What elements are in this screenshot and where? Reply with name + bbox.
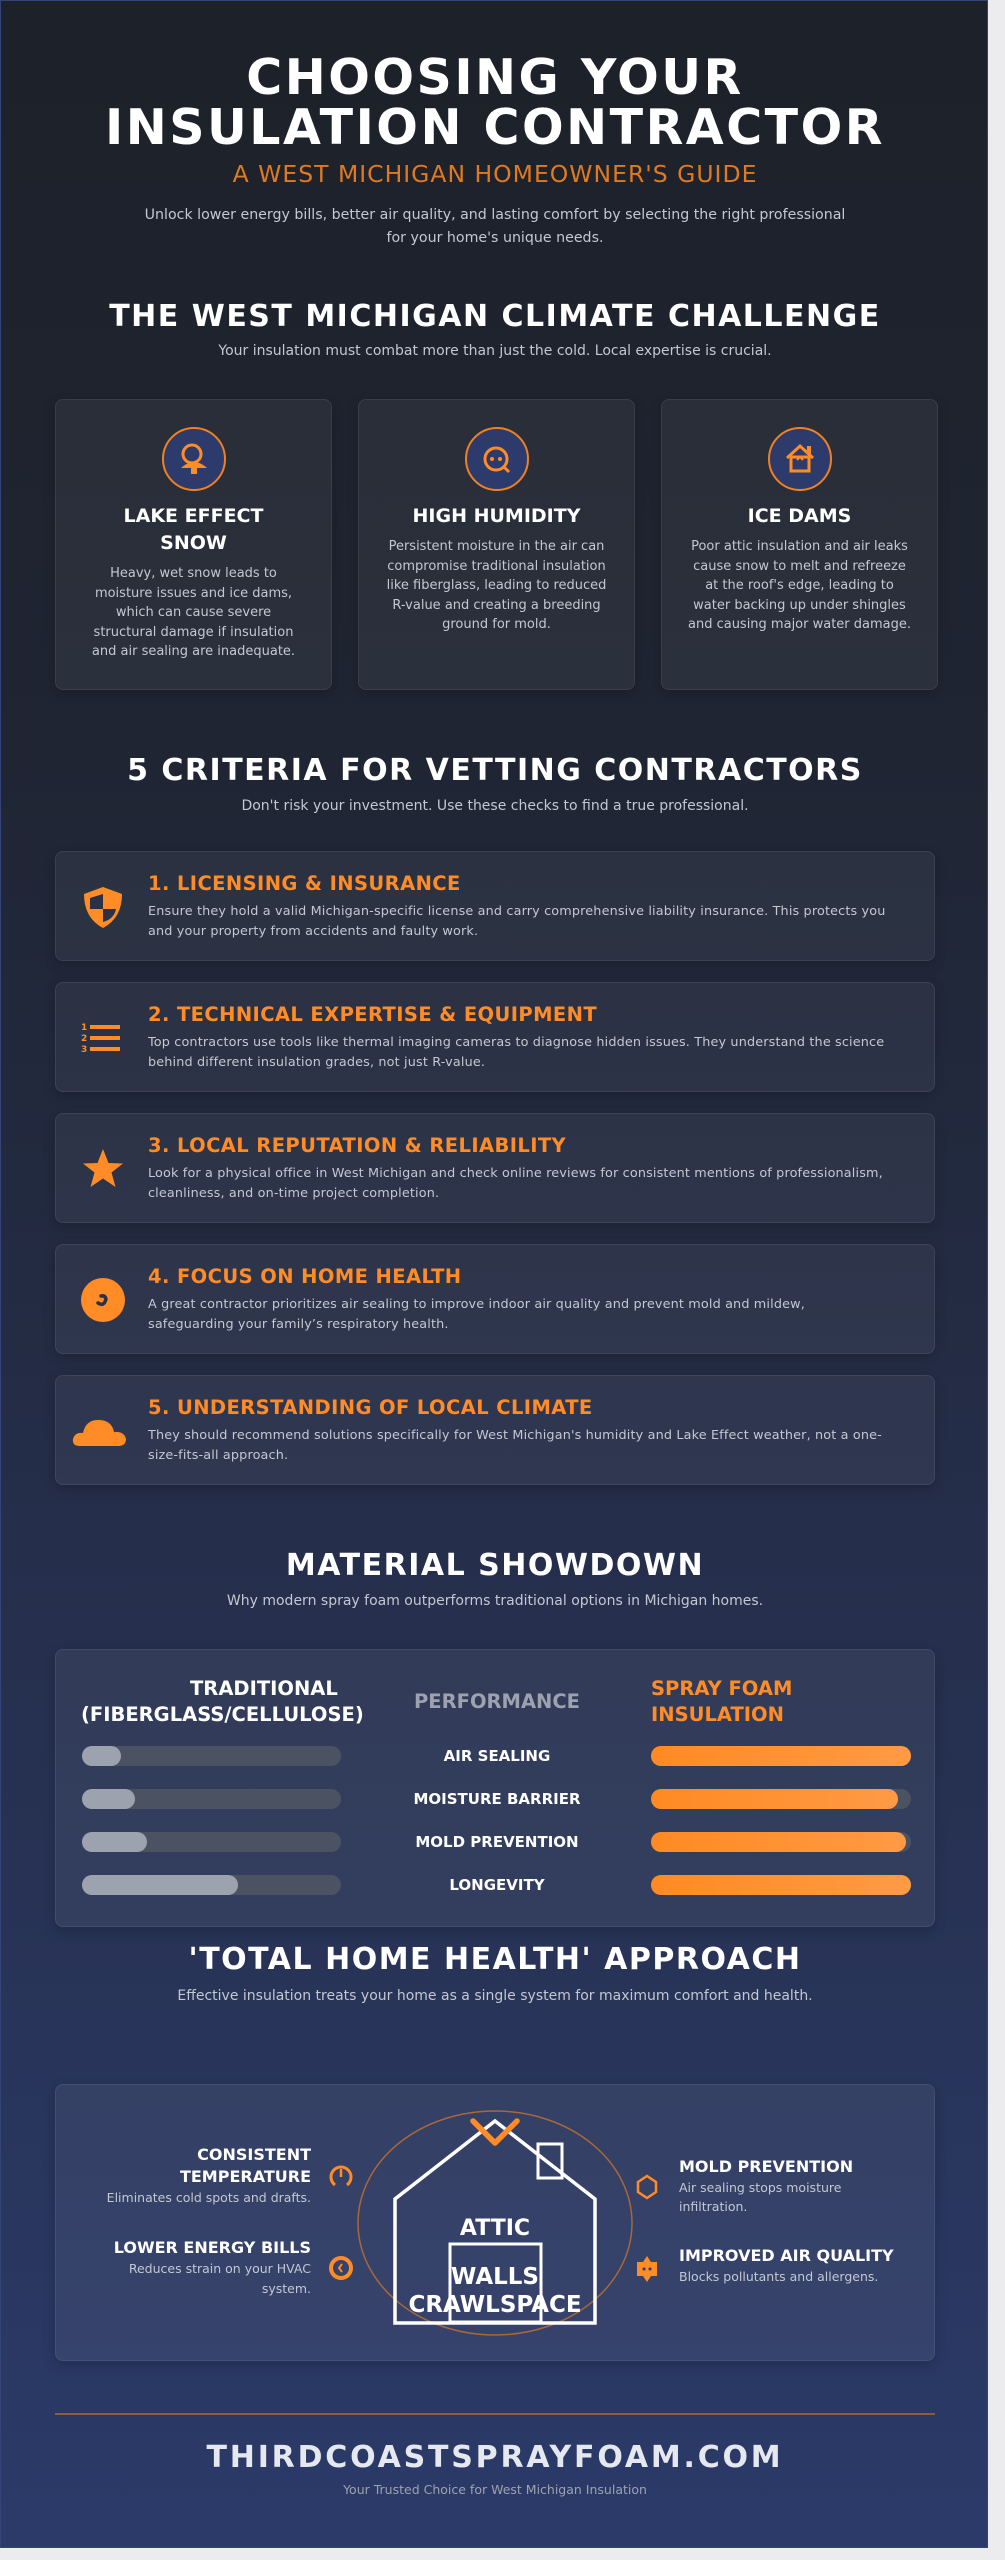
subtitle: A WEST MICHIGAN HOMEOWNER'S GUIDE xyxy=(233,160,757,188)
icon: mold xyxy=(636,2174,658,2200)
bar row: mold prevention: MOLD PREVENTION xyxy=(415,1833,579,1851)
card text: Heavy, wet snow leads to moisture issues and ice dams, which can cause severe structural damage if insulation and air sealing are inadequate. xyxy=(92,566,295,659)
chart header: spray foam: INSULATION xyxy=(651,1703,784,1726)
title: INSULATION CONTRACTOR xyxy=(105,99,885,156)
bar row: mold prevention xyxy=(82,1832,911,1852)
diagram: house: ATTIC xyxy=(460,2216,530,2241)
panel: criterion 2: 2. TECHNICAL EXPERTISE & EQUIPMENT xyxy=(148,1003,597,1026)
panel: ice dams xyxy=(661,399,938,690)
title xyxy=(105,49,885,156)
bar row: moisture barrier: MOISTURE BARRIER xyxy=(413,1790,580,1808)
benefit: consistent temperature: Eliminates cold spots and drafts. xyxy=(107,2190,311,2205)
chart header: performance: PERFORMANCE xyxy=(414,1690,580,1713)
icon: star xyxy=(83,1149,123,1187)
icon: house xyxy=(768,427,832,491)
panel: criterion 2 xyxy=(55,982,935,1092)
icon: list: 2 xyxy=(81,1034,87,1044)
card text: Poor attic insulation and air leaks cause snow to melt and refreeze at the roof's edge, leading to water backing up under shingles and causing major water damage. xyxy=(688,539,911,632)
panel: criterion 4 xyxy=(55,1244,935,1354)
benefit: mold prevention xyxy=(679,2157,853,2214)
panel: criterion 4: 4. FOCUS ON HOME HEALTH xyxy=(148,1265,462,1288)
benefit: lower energy bills xyxy=(114,2238,311,2296)
heading: climate challenge: THE WEST MICHIGAN CLIMATE CHALLENGE xyxy=(109,299,881,334)
panel: comparison chart xyxy=(55,1649,935,1927)
benefit: improved air quality: Blocks pollutants and allergens. xyxy=(679,2269,878,2284)
heading: material showdown: MATERIAL SHOWDOWN xyxy=(286,1548,704,1583)
card title: LAKE EFFECT xyxy=(124,505,263,527)
diagram: house: CRAWLSPACE xyxy=(408,2292,582,2318)
icon: list xyxy=(81,1023,120,1055)
bar row: longevity xyxy=(82,1875,911,1895)
panel: criterion 1: 1. LICENSING & INSURANCE xyxy=(148,872,461,895)
benefit: consistent temperature: CONSISTENT xyxy=(197,2145,311,2164)
benefit: lower energy bills: LOWER ENERGY BILLS xyxy=(114,2238,311,2257)
diagram: house xyxy=(357,2110,633,2336)
panel: high humidity xyxy=(358,399,635,690)
chart header: spray foam xyxy=(651,1677,792,1726)
heading: total home health: 'TOTAL HOME HEALTH' APPROACH xyxy=(189,1942,801,1977)
chart header: traditional xyxy=(81,1677,364,1726)
intro text: for your home's unique needs. xyxy=(386,230,603,246)
icon: air quality xyxy=(637,2256,657,2282)
benefit: lower energy bills: Reduces strain on your HVAC system. xyxy=(129,2261,311,2296)
panel: criterion 2: Top contractors use tools like thermal imaging cameras to diagnose hidden issues. They understand the science behind different insulation grades, not just R-value. xyxy=(148,1035,884,1070)
panel: criterion 5: 5. UNDERSTANDING OF LOCAL CLIMATE xyxy=(148,1396,593,1419)
panel: criterion 5 xyxy=(55,1375,935,1485)
bar row: air sealing xyxy=(82,1746,911,1766)
panel: criterion 5: They should recommend solutions specifically for West Michigan's humidity and Lake Effect weather, not a one-size-fits-all approach. xyxy=(148,1428,882,1463)
card title xyxy=(124,505,264,554)
card title: SNOW xyxy=(160,532,227,554)
footer: website: THIRDCOASTSPRAYFOAM.COM xyxy=(207,2440,783,2475)
benefit: mold prevention: Air sealing stops moisture infiltration. xyxy=(679,2180,841,2214)
subheading: material: Why modern spray foam outperforms traditional options in Michigan homes. xyxy=(227,1593,763,1609)
footer: tagline: Your Trusted Choice for West Michigan Insulation xyxy=(343,2482,647,2497)
card title: ICE DAMS xyxy=(748,505,851,527)
chart header: traditional: TRADITIONAL xyxy=(190,1677,338,1700)
title: CHOOSING YOUR xyxy=(246,49,744,106)
icon: humidity xyxy=(465,427,529,491)
intro text xyxy=(145,207,845,246)
benefit: improved air quality: IMPROVED AIR QUALITY xyxy=(679,2246,894,2265)
bar row: air sealing: AIR SEALING xyxy=(444,1747,550,1765)
bar row: moisture barrier xyxy=(82,1789,911,1809)
panel: criterion 3: 3. LOCAL REPUTATION & RELIABILITY xyxy=(148,1134,566,1157)
subheading: climate: Your insulation must combat more than just the cold. Local expertise is crucial. xyxy=(218,343,772,359)
bar row: longevity: LONGEVITY xyxy=(449,1876,545,1894)
icon: shield xyxy=(84,887,122,928)
icon: energy xyxy=(329,2256,353,2280)
icon: thermometer xyxy=(330,2166,352,2186)
benefit: consistent temperature xyxy=(107,2145,311,2205)
panel: criterion 4: A great contractor prioritizes air sealing to improve indoor air quality and prevent mold and mildew, safeguarding your family’s respiratory health. xyxy=(148,1297,805,1332)
diagram: house: WALLS xyxy=(451,2264,539,2290)
icon: cloud xyxy=(72,1420,126,1446)
subheading: home health: Effective insulation treats your home as a single system for maximum comfort and health. xyxy=(177,1988,813,2004)
heading: criteria: 5 CRITERIA FOR VETTING CONTRACTORS xyxy=(127,753,863,788)
panel: criterion 3 xyxy=(55,1113,935,1223)
card title: HIGH HUMIDITY xyxy=(413,505,580,527)
benefit: mold prevention: MOLD PREVENTION xyxy=(679,2157,853,2176)
card text: Persistent moisture in the air can compromise traditional insulation like fiberglass, leading to reduced R-value and creating a breeding ground for mold. xyxy=(387,539,606,632)
chart header: spray foam: SPRAY FOAM xyxy=(651,1677,792,1700)
panel: home diagram xyxy=(55,2084,935,2361)
chart header: traditional: (FIBERGLASS/CELLULOSE) xyxy=(81,1703,364,1726)
icon: snow xyxy=(162,427,226,491)
panel: criterion 1 xyxy=(55,851,935,961)
icon: list: 1 xyxy=(81,1023,87,1033)
panel: lake effect snow xyxy=(55,399,332,690)
panel: criterion 1: Ensure they hold a valid Michigan-specific license and carry comprehensive liability insurance. This protects you and your property from accidents and faulty work. xyxy=(148,904,886,939)
subheading: criteria: Don't risk your investment. Use these checks to find a true professional. xyxy=(241,798,749,814)
intro text: Unlock lower energy bills, better air quality, and lasting comfort by selecting the right professional xyxy=(145,207,845,223)
icon: health xyxy=(81,1278,125,1322)
benefit: improved air quality xyxy=(679,2246,894,2284)
benefit: consistent temperature: TEMPERATURE xyxy=(180,2167,311,2186)
panel: criterion 3: Look for a physical office in West Michigan and check online reviews for consistent mentions of professionalism, cleanliness, and on-time project completion. xyxy=(148,1166,883,1201)
icon: list: 3 xyxy=(81,1045,87,1055)
